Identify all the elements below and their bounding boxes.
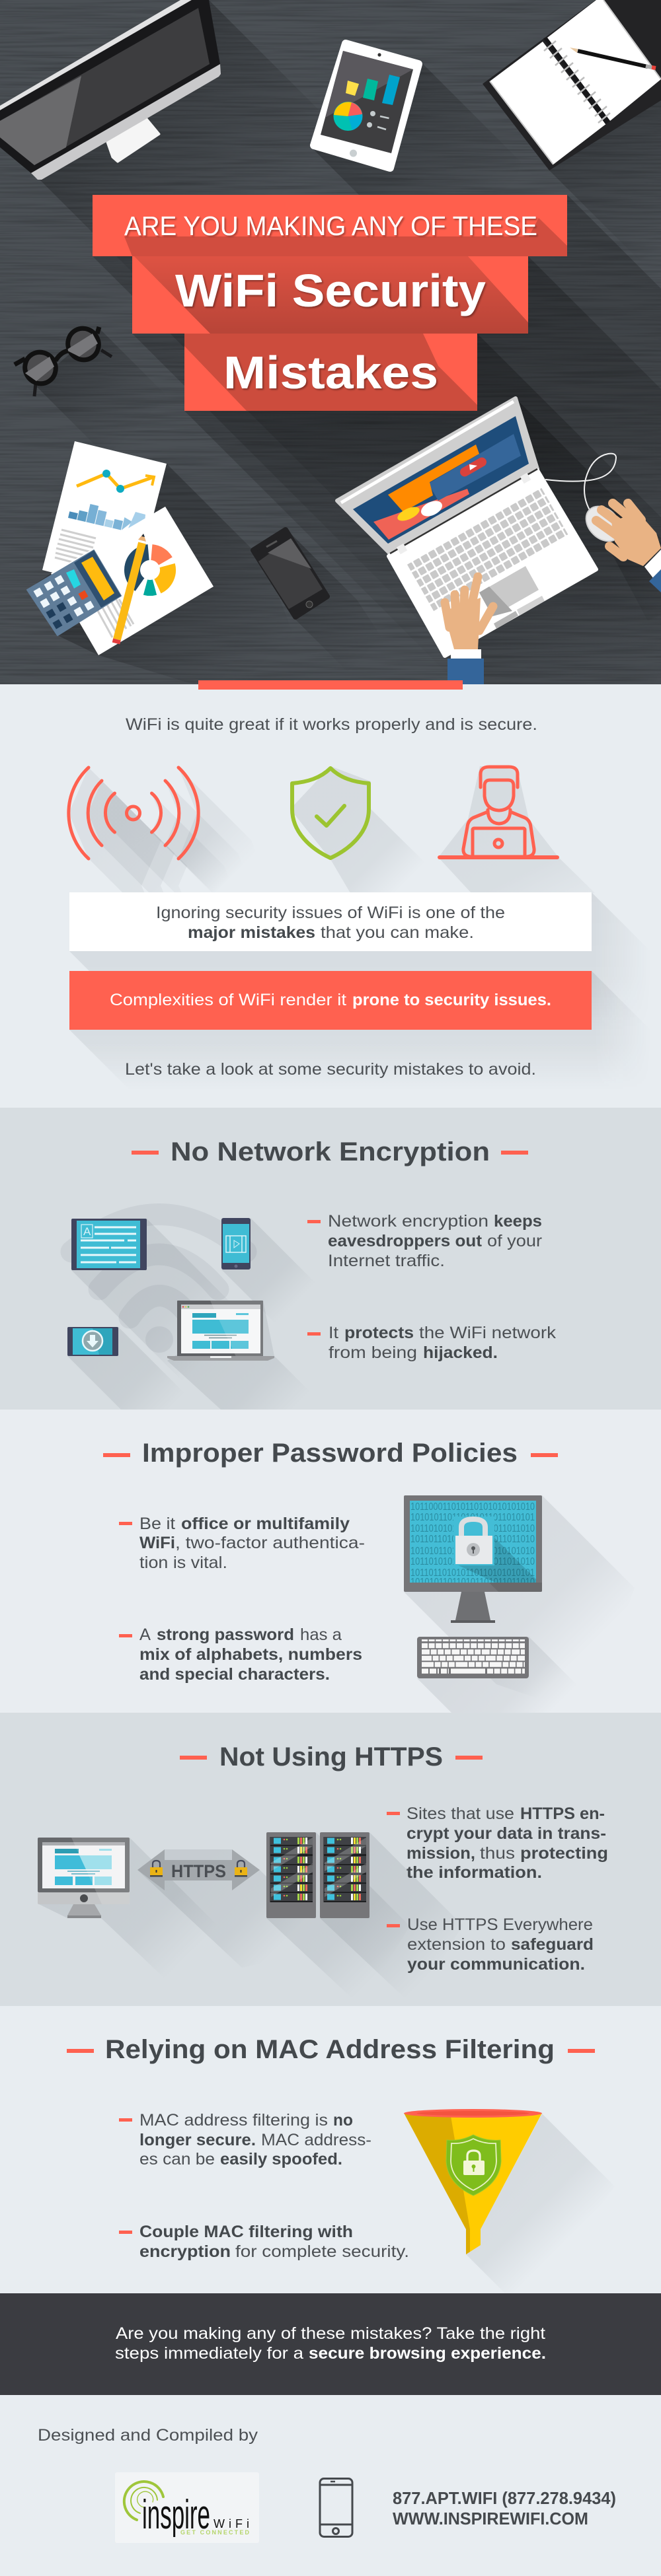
text block: strong password: and special characters. [139, 1665, 330, 1684]
icon: monitor with padlock: 101101010110101101011011010 [410, 1556, 535, 1567]
title line three: Mistakes [223, 347, 438, 398]
text block: keeps eavesdroppers out: of your [487, 1232, 542, 1250]
panel: improper password policies [103, 1443, 617, 1713]
text block: two-factor authentication: WiFi [139, 1534, 175, 1552]
text block: couple with encryption [119, 2223, 409, 2261]
panel: closing call to action: secure browsing experience. [309, 2344, 546, 2363]
logo: inspire wifi: WiFi [214, 2517, 249, 2530]
watermark wifi symbol [71, 1214, 246, 1353]
text block: mac filtering not secure: es can be [139, 2150, 215, 2168]
text block: https everywhere [387, 1915, 594, 1974]
panel: footer [0, 2395, 661, 2576]
shadow: funnel [466, 2114, 615, 2293]
icon: right padlock [235, 1861, 247, 1877]
text block: https encrypts: crypt your data in trans- [407, 1824, 606, 1843]
icon: wireless signal [69, 768, 198, 859]
icon: monitor with padlock: 101101010110110101011011010 [410, 1523, 535, 1534]
icon: phone video [221, 1218, 251, 1270]
text block: couple with encryption: Couple MAC filtering with [139, 2223, 353, 2241]
icon: desktop computer [38, 1838, 130, 1918]
lead-in text: Let's take a look at some security mistakes to avoid. [125, 1060, 536, 1079]
icon: monitor with padlock: 101010110110101011010101010 [410, 1546, 535, 1557]
text block: https encrypts [387, 1805, 608, 1882]
text block: protects from hijacking: the WiFi network [419, 1324, 557, 1342]
logo: inspire wifi [115, 2472, 259, 2543]
icon: tablet with charts [314, 44, 418, 168]
text block: https everywhere: extension to [407, 1935, 506, 1954]
text block: keeps eavesdroppers out: Network encryption [328, 1212, 488, 1231]
text block: keeps eavesdroppers out: eavesdroppers out [328, 1232, 483, 1250]
icon: smartphone [253, 530, 327, 617]
callout: major mistakes: major mistakes [188, 923, 315, 942]
text block: protects from hijacking: protects [344, 1324, 414, 1342]
text block: mac filtering not secure [119, 2111, 371, 2168]
text block: strong password: mix of alphabets, numbers [139, 1645, 362, 1664]
text block: couple with encryption: encryption [139, 2242, 231, 2261]
panel: closing call to action [0, 2293, 661, 2395]
panel: intro [67, 680, 631, 1078]
callout: major mistakes [69, 892, 592, 951]
text block: two-factor authentication [119, 1515, 365, 1572]
text block: strong password: strong password [157, 1626, 294, 1644]
heading: Not Using HTTPS [219, 1742, 443, 1771]
icon: security shield with check [292, 768, 369, 858]
title banners [93, 195, 567, 411]
text block: strong password [119, 1626, 362, 1684]
text block: mac filtering not secure: no [333, 2111, 353, 2129]
text block: keeps eavesdroppers out: keeps [494, 1212, 542, 1231]
text block: strong password: A [139, 1626, 151, 1644]
text block: mac filtering not secure: easily spoofed. [220, 2150, 342, 2168]
text block: https encrypts: HTTPS en- [520, 1805, 605, 1823]
shadow: text boxes [69, 892, 625, 1003]
text block: keeps eavesdroppers out [307, 1212, 542, 1270]
icon shadows [69, 766, 595, 931]
text block: https encrypts: the information. [407, 1863, 542, 1882]
icon: charts, papers, calculator and pencil [27, 441, 214, 655]
contact details: 877.APT.WIFI (877.278.9434) [393, 2488, 616, 2508]
icon: mobile phone [320, 2478, 352, 2536]
callout: complexities: Complexities of WiFi render it [110, 991, 346, 1009]
panel: hero desk scene [0, 0, 661, 684]
text block: https everywhere: Use HTTPS Everywhere [407, 1915, 593, 1934]
icon: laptop with hands and mouse [337, 398, 661, 684]
text block: protects from hijacking: hijacked. [423, 1343, 498, 1362]
icon: tablet download [67, 1327, 118, 1356]
text block: https everywhere: safeguard [511, 1935, 594, 1954]
text block: strong password: has a [300, 1626, 342, 1644]
icon: laptop web page [167, 1301, 274, 1361]
callout: complexities [69, 971, 592, 1030]
panel: not using https [0, 1713, 661, 2006]
text block: https encrypts: thus [480, 1844, 515, 1863]
shadows: monitor and keyboard [404, 1495, 635, 1744]
text block: two-factor authentication: tion is vital. [139, 1554, 227, 1572]
text block: protects from hijacking: It [329, 1324, 338, 1342]
shadows: devices [38, 1832, 463, 2006]
icon: monitor with padlock: 101010110110101101011011010 [410, 1577, 535, 1588]
callout: major mistakes: that you can make. [321, 923, 474, 942]
icon: tablet article [71, 1219, 147, 1270]
icon: monitor with padlock: 101101101010110110101010101 [410, 1567, 535, 1579]
https label: HTTPS [171, 1861, 226, 1881]
panel: closing call to action: steps immediately for a [115, 2344, 303, 2363]
text block: keeps eavesdroppers out: Internet traffic. [328, 1252, 445, 1270]
text block: couple with encryption: for complete security. [235, 2242, 409, 2261]
text block: two-factor authentication: office or multifamily [181, 1515, 350, 1533]
icon: monitor with padlock: 101010110110101011011010101 [410, 1512, 535, 1523]
panel: closing call to action: Are you making any of these mistakes? Take the right [116, 2324, 545, 2343]
icon: funnel with security shield [404, 2109, 542, 2254]
icon: monitor with padlock: 101100011010110101010101010 [410, 1501, 535, 1513]
heading: No Network Encryption [171, 1137, 490, 1166]
title line one: ARE YOU MAKING ANY OF THESE [124, 211, 537, 241]
text block: two-factor authentication: , two-factor authentica- [175, 1534, 365, 1552]
arrow: https connection [137, 1849, 260, 1890]
intro text: WiFi is quite great if it works properly and is secure. [126, 715, 537, 734]
contact details: WWW.INSPIREWIFI.COM [393, 2509, 588, 2528]
text block: https encrypts: Sites that use [407, 1805, 514, 1823]
icon: person at laptop [440, 767, 557, 857]
text block: mac filtering not secure: MAC address filtering is [139, 2111, 328, 2129]
icon: tablet article: A [83, 1225, 91, 1238]
device shadows [67, 1218, 330, 1410]
panel: no network encryption [0, 1108, 661, 1410]
icon: keyboard [417, 1637, 529, 1678]
icon: spiral notebook and pencil [483, 0, 661, 170]
accent bar [198, 680, 463, 690]
long shadows on desk [27, 0, 661, 684]
logo: inspire wifi: GET CONNECTED [180, 2529, 250, 2536]
icon: server racks [266, 1832, 369, 1918]
text block: https encrypts: protecting [520, 1844, 608, 1863]
shadow: red box [69, 971, 625, 1069]
logo: inspire wifi: inspire [142, 2492, 210, 2538]
heading: Relying on MAC Address Filtering [105, 2035, 555, 2064]
icon: left padlock [150, 1861, 163, 1877]
credit line: Designed and Compiled by [38, 2426, 258, 2445]
panel: relying on mac address filtering [0, 2006, 661, 2293]
text block: https everywhere: your communication. [407, 1955, 585, 1974]
icon: desktop monitor [0, 0, 221, 180]
text block: mac filtering not secure: MAC address- [261, 2131, 371, 2149]
title line two: WiFi Security [175, 265, 486, 316]
text block: two-factor authentication: Be it [139, 1515, 175, 1533]
heading: Improper Password Policies [142, 1439, 518, 1468]
icon: eyeglasses [15, 323, 112, 396]
icon: monitor with padlock: 101101101010110101011011010 [410, 1534, 535, 1545]
contact details [393, 2488, 616, 2528]
text block: protects from hijacking: from being [329, 1343, 417, 1362]
text block: mac filtering not secure: longer secure. [139, 2131, 256, 2149]
icon: monitor with padlock [404, 1495, 542, 1623]
text block: https encrypts: mission, [407, 1844, 475, 1863]
callout: complexities: prone to security issues. [352, 991, 551, 1009]
callout: major mistakes: Ignoring security issues of WiFi is one of the [156, 904, 505, 922]
text block: protects from hijacking [307, 1324, 557, 1362]
